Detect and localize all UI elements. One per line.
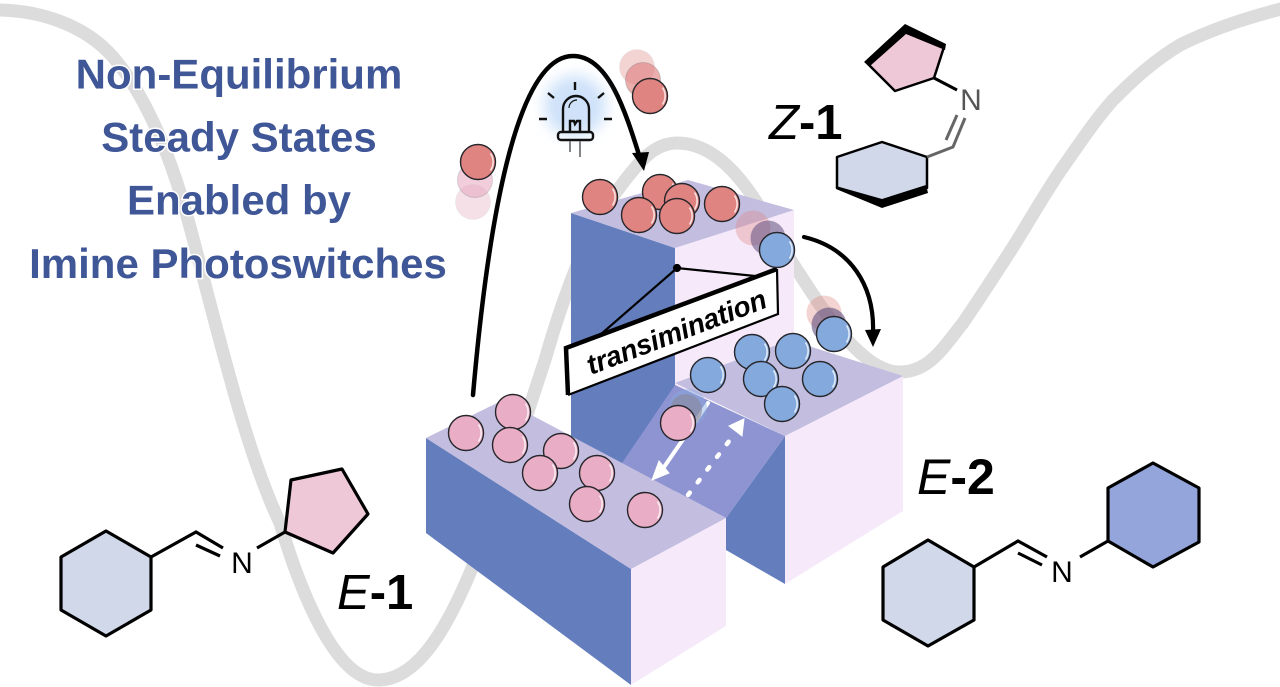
molecule: E-2: N — [1051, 556, 1073, 589]
ghost and pink particle on ramp — [660, 389, 707, 440]
arrow: photoexcitation — [473, 56, 649, 395]
ramp between blocks — [622, 385, 785, 518]
title — [29, 50, 447, 287]
icon: LED light bulb — [539, 75, 612, 157]
transimination label — [566, 269, 778, 395]
title: Non-Equilibrium — [76, 50, 402, 98]
red particles on tall block — [582, 174, 740, 234]
ghost trail: red left — [456, 144, 496, 220]
title: Imine Photoswitches — [29, 240, 447, 287]
transimination leader lines — [600, 265, 755, 335]
label: E-1: E-1 — [337, 566, 413, 620]
ghost trail: transition to blue — [736, 210, 794, 268]
molecule: E-2 — [883, 463, 1199, 646]
front block — [426, 400, 726, 685]
arrow: relaxation — [804, 237, 881, 347]
molecule: E-1: N — [231, 547, 253, 580]
blue particles on right block — [690, 334, 838, 422]
ghost trail: falling blue — [806, 296, 852, 352]
white solid arrow on ramp — [652, 403, 708, 480]
transimination label: transimination — [582, 284, 771, 381]
tall block — [571, 180, 794, 500]
label: Z-1: Z-1 — [768, 96, 843, 150]
title: Steady States — [101, 114, 377, 160]
title: Enabled by — [127, 176, 352, 224]
right block — [675, 340, 903, 584]
white dashed arrow on ramp — [688, 419, 744, 495]
label: E-2: E-2 — [917, 449, 995, 505]
ghost trail: red top — [620, 50, 668, 114]
pink particles on front block — [448, 394, 662, 528]
molecule: E-1 — [61, 469, 368, 636]
molecule: Z-1 — [836, 24, 982, 208]
molecule: Z-1: N — [960, 84, 982, 117]
